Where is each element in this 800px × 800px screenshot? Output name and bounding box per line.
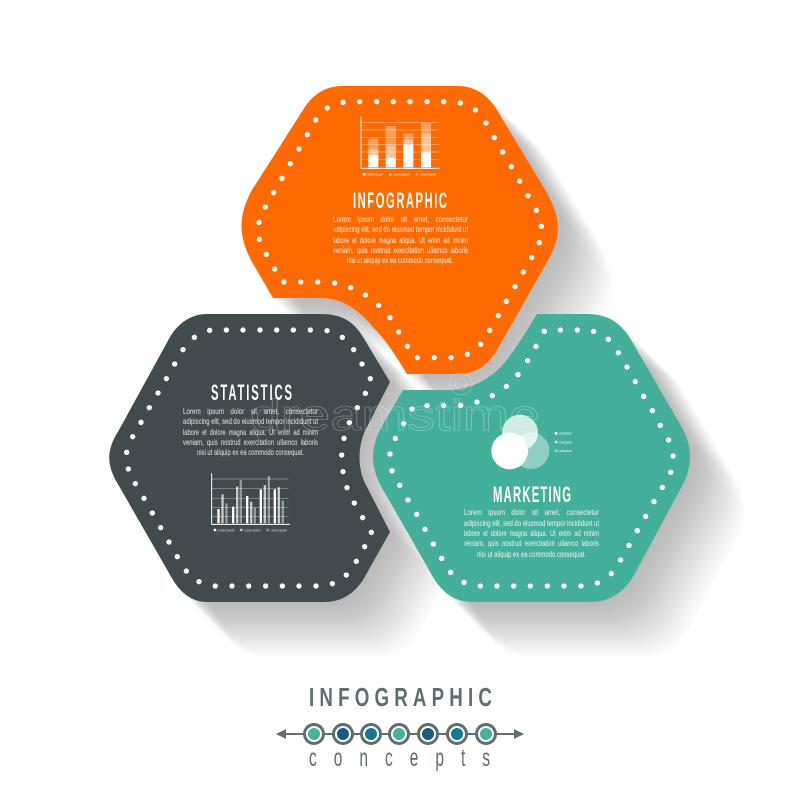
stacked bar chart: Lorem ipsum: [393, 173, 410, 177]
teal dotted border: [387, 327, 676, 589]
grouped bar chart: Lorem ipsum: [218, 528, 234, 532]
teal body text: veniam, quis nostrud exercitation ullamco laboris: [464, 539, 599, 548]
orange body text: [333, 215, 469, 265]
heading: STATISTICS: STATISTICS: [211, 380, 292, 405]
long shadow: dark panel: [112, 317, 444, 656]
watermark: dreamstime: [250, 391, 540, 440]
dark body text: [183, 407, 319, 457]
orange body text: adipiscing elit, sed do eiusmod tempor incididunt ut: [333, 225, 469, 234]
orange body text: labore et dolore magna aliqua. Ut enim ad minim: [333, 236, 468, 245]
orange hexagon shape: [242, 86, 558, 374]
grouped bar chart: Lorem ipsum: [244, 528, 261, 532]
timeline dots: [304, 724, 496, 744]
heading: INFOGRAPHIC: INFOGRAPHIC: [353, 188, 447, 213]
orange body text: Lorem ipsum dolor sit amet, consectetur: [333, 215, 468, 224]
orange body text: veniam, quis nostrud exercitation ullamco laboris: [333, 246, 468, 255]
venn diagram: Lorem ipsum: [558, 440, 572, 444]
dark hexagon shape: [109, 314, 390, 602]
stacked bar chart: Lorem ipsum: [419, 173, 436, 177]
long shadow: orange panel: [244, 89, 612, 428]
bottom subtitle: concepts: concepts: [309, 744, 490, 772]
grouped bar chart: [212, 473, 290, 532]
panel: dark statistics: [109, 314, 390, 602]
teal body text: [464, 508, 600, 559]
venn diagram: Lorem ipsum: [558, 432, 572, 436]
panel: teal marketing: [373, 314, 690, 602]
right arrowhead: [514, 729, 524, 739]
dark body text: adipiscing elit, sed do eiusmod tempor incididunt ut: [183, 417, 319, 426]
teal hexagon shape: [373, 314, 690, 602]
teal body text: labore et dolore magna aliqua. Ut enim ad minim: [464, 529, 599, 538]
dark body text: labore et dolore magna aliqua. Ut enim ad minim: [183, 428, 318, 437]
long shadow: teal panel: [376, 317, 744, 656]
stacked bar chart: Lorem ipsum: [366, 173, 383, 177]
dark dotted border: [124, 327, 374, 589]
timeline with arrows and dots: [276, 724, 524, 744]
left arrowhead: [276, 729, 286, 739]
bottom title: INFOGRAPHIC: INFOGRAPHIC: [309, 682, 492, 712]
grouped bar chart: Lorem ipsum: [270, 528, 287, 532]
dark body text: nisi ut aliquip ex ea commodo consequat.: [197, 448, 304, 457]
watermark: [250, 373, 540, 440]
venn diagram: Lorem ipsum: [558, 449, 572, 453]
timeline line: [283, 733, 517, 735]
orange body text: nisi ut aliquip ex ea commodo consequat.: [347, 256, 453, 265]
panel: orange infographic: [242, 86, 558, 374]
teal body text: Lorem ipsum dolor sit amet, consectetur: [464, 508, 599, 517]
orange dotted border: [256, 99, 544, 360]
venn diagram: [491, 415, 572, 469]
teal body text: adipiscing elit, sed do eiusmod tempor incididunt ut: [464, 519, 600, 528]
stacked bar chart: [361, 117, 440, 177]
dark body text: veniam, quis nostrud exercitation ullamco laboris: [183, 438, 318, 447]
dark body text: Lorem ipsum dolor sit amet, consectetur: [183, 407, 318, 416]
heading: MARKETING: MARKETING: [493, 482, 571, 507]
teal body text: nisi ut aliquip ex ea commodo consequat.: [477, 550, 586, 559]
